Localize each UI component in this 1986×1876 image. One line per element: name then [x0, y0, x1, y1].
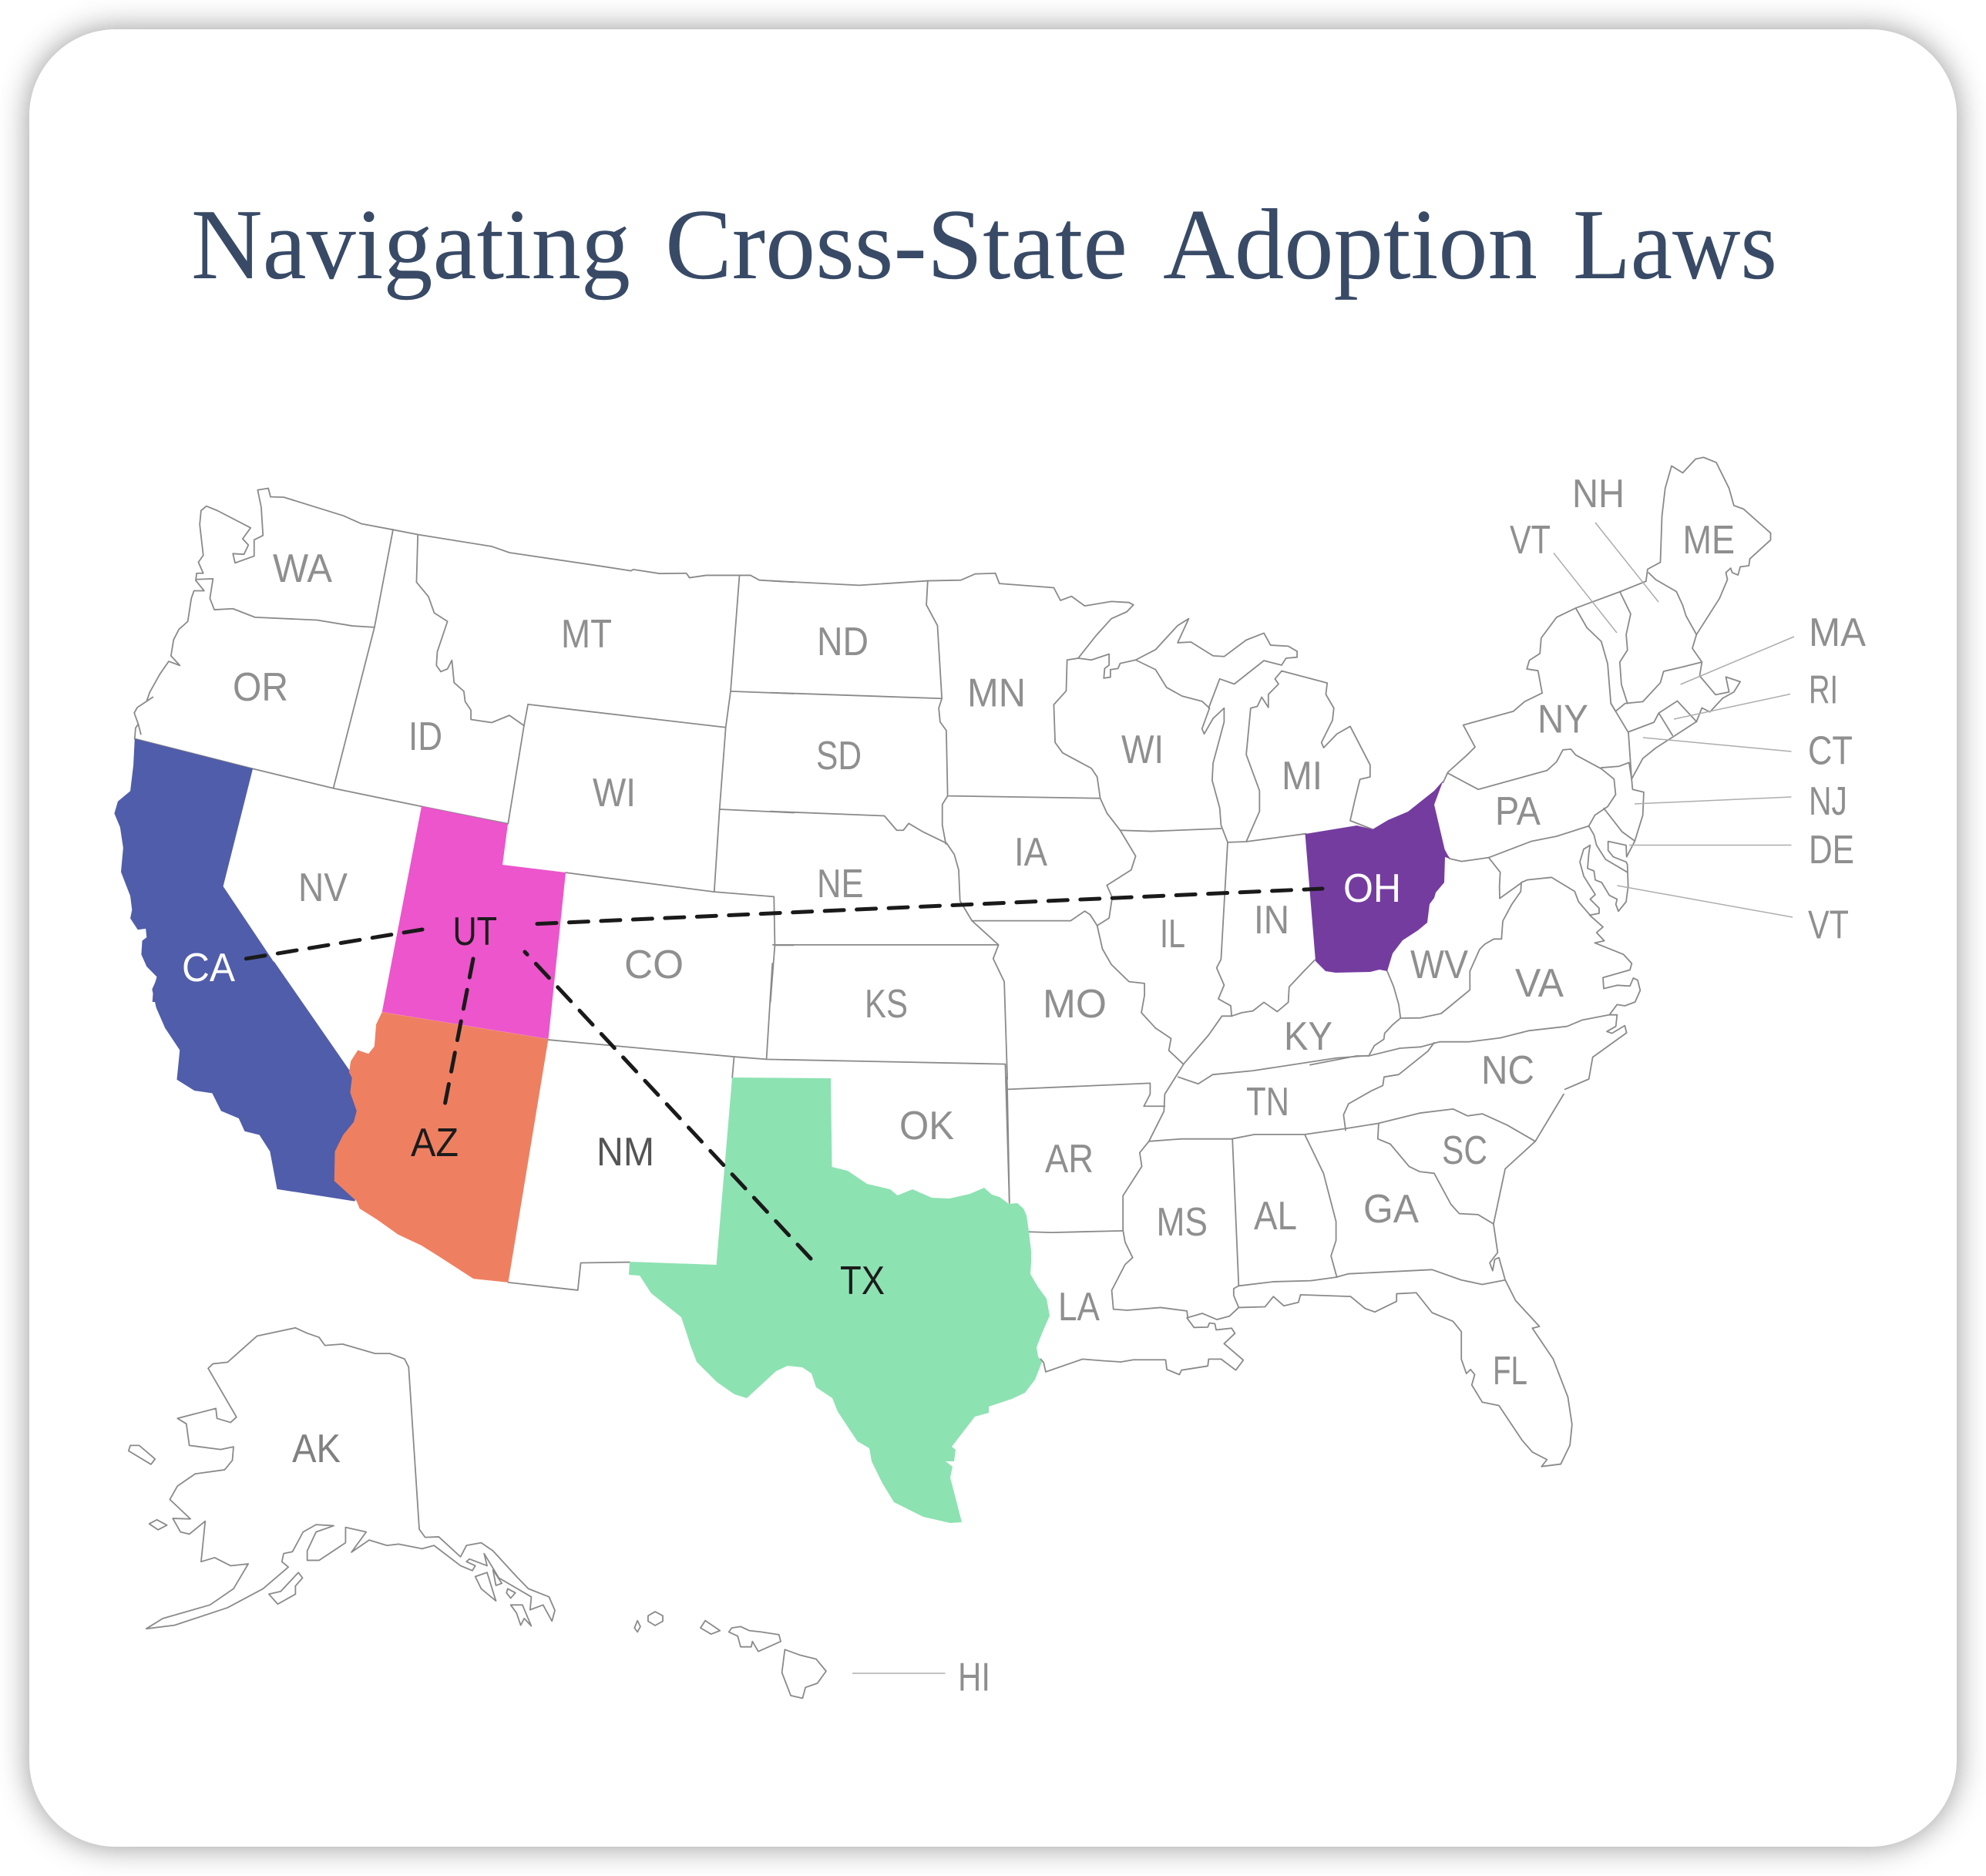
state abbreviation labels: VT	[1510, 518, 1551, 563]
state abbreviation labels: GA	[1363, 1187, 1419, 1232]
state abbreviation labels: AR	[1045, 1137, 1094, 1182]
state abbreviation labels: NJ	[1809, 779, 1847, 824]
map of the United States	[114, 457, 1866, 1700]
title: Adoption	[1163, 189, 1537, 301]
dashed routes between states	[246, 889, 1322, 1259]
state abbreviation labels: AZ	[411, 1121, 459, 1165]
state: Ohio	[1306, 781, 1450, 973]
state abbreviation labels: LA	[1058, 1285, 1100, 1330]
state abbreviation labels: ME	[1683, 518, 1735, 563]
state abbreviation labels: PA	[1495, 789, 1541, 834]
state abbreviation labels: MN	[967, 671, 1026, 715]
state abbreviation labels: WI	[1121, 728, 1164, 772]
state abbreviation labels: KY	[1284, 1014, 1332, 1059]
state abbreviation labels: NC	[1481, 1048, 1534, 1093]
state: Texas	[629, 1078, 1050, 1523]
southeast state outlines	[1007, 1043, 1572, 1467]
state abbreviation labels: IL	[1160, 912, 1185, 956]
southwest state outlines	[508, 963, 1010, 1290]
state abbreviation labels: AL	[1254, 1194, 1297, 1239]
state abbreviation labels: RI	[1809, 668, 1838, 713]
state abbreviation labels: FL	[1493, 1349, 1527, 1394]
state: Arizona	[334, 1012, 548, 1283]
state borders	[129, 457, 1771, 1698]
Alaska and Hawaii outlines	[129, 1328, 826, 1698]
state abbreviation labels: HI	[958, 1656, 990, 1700]
state abbreviation labels: VT	[1808, 903, 1849, 948]
state abbreviation labels: MI	[1282, 754, 1322, 798]
northeast state outlines	[1443, 457, 1771, 856]
state abbreviation labels: WV	[1410, 943, 1468, 987]
state abbreviation labels: CO	[624, 943, 684, 987]
state abbreviation labels: WA	[273, 546, 332, 591]
state abbreviation labels: TN	[1246, 1080, 1289, 1125]
northwest states outlines	[134, 488, 794, 1002]
state abbreviation labels: TX	[840, 1259, 885, 1303]
state abbreviation labels: OH	[1343, 866, 1401, 911]
midwest state outlines	[771, 573, 1373, 1079]
leader lines for small states	[852, 523, 1794, 1673]
state abbreviation labels: ID	[408, 714, 442, 759]
state abbreviation labels: NY	[1537, 697, 1588, 741]
state abbreviation labels: VA	[1515, 961, 1564, 1006]
state abbreviation labels: NM	[596, 1130, 654, 1175]
state abbreviation labels: WI	[593, 771, 636, 815]
state abbreviation labels: AK	[292, 1427, 341, 1471]
title: Laws	[1573, 189, 1777, 301]
state abbreviation labels: OR	[233, 665, 288, 710]
state abbreviation labels: ND	[817, 620, 869, 664]
state abbreviation labels: CT	[1808, 729, 1853, 774]
state: Utah	[382, 806, 566, 1039]
state abbreviation labels: IN	[1254, 898, 1289, 943]
state abbreviation labels	[182, 472, 1866, 1700]
state abbreviation labels: NV	[298, 866, 348, 910]
state abbreviation labels: IA	[1014, 830, 1047, 875]
title: Navigating	[191, 189, 630, 301]
state abbreviation labels: CA	[182, 946, 235, 990]
title: Cross-State	[665, 189, 1127, 301]
state abbreviation labels: MT	[561, 612, 612, 657]
state abbreviation labels: UT	[453, 909, 497, 954]
state abbreviation labels: MA	[1809, 610, 1866, 655]
state abbreviation labels: MS	[1156, 1200, 1208, 1245]
state abbreviation labels: KS	[865, 982, 908, 1027]
state abbreviation labels: DE	[1809, 828, 1854, 872]
state abbreviation labels: NH	[1572, 472, 1625, 516]
state abbreviation labels: SD	[816, 734, 862, 778]
state abbreviation labels: SC	[1442, 1128, 1487, 1173]
state abbreviation labels: OK	[899, 1104, 954, 1148]
highlighted states	[114, 738, 1450, 1523]
state: California	[114, 738, 360, 1202]
mid-Atlantic state outlines	[1310, 826, 1640, 1089]
state abbreviation labels: MO	[1043, 982, 1107, 1027]
state abbreviation labels: NE	[817, 862, 863, 906]
